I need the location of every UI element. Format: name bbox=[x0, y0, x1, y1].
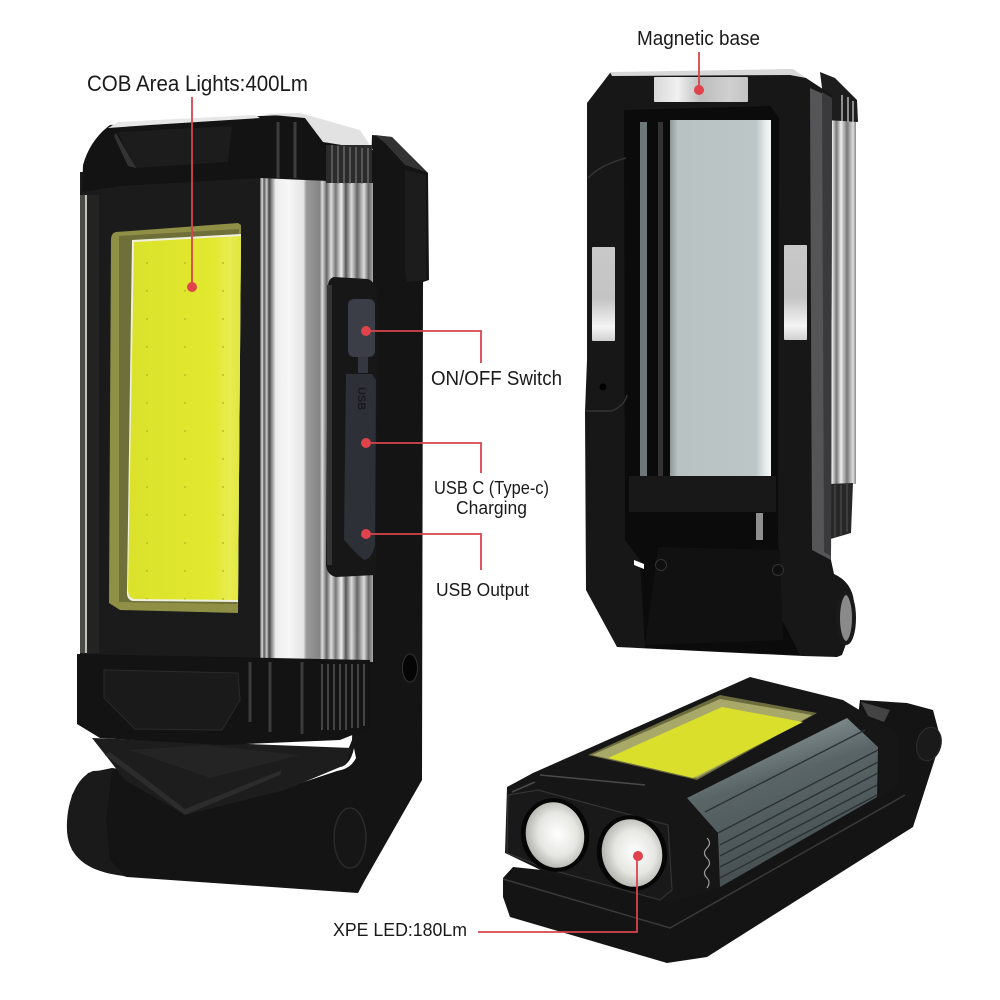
top magnet plate bbox=[654, 77, 748, 102]
COB yellow panel bbox=[128, 236, 241, 600]
back frame bbox=[585, 70, 854, 657]
arm top highlight bbox=[375, 135, 426, 172]
callout: USB C charging: USB C (Type-c) bbox=[434, 478, 549, 498]
body top bbox=[505, 677, 897, 902]
base edge highlight bbox=[503, 795, 905, 928]
aluminium grooves bbox=[705, 730, 878, 878]
top cap highlight left bbox=[108, 115, 260, 128]
lower shelf bbox=[645, 547, 783, 645]
right lens bbox=[588, 807, 676, 899]
frame highlight bbox=[610, 69, 806, 78]
aluminium body bbox=[687, 718, 878, 887]
hinge highlight bbox=[861, 702, 890, 722]
arm pivot hole bbox=[402, 654, 418, 682]
hinge cap bbox=[913, 724, 945, 764]
USB label: USB bbox=[355, 387, 367, 410]
left lens bbox=[513, 790, 597, 880]
chevron bracket bbox=[92, 738, 352, 815]
COB yellow panel bbox=[608, 707, 803, 778]
callout: COB area lights bbox=[87, 71, 308, 292]
COB LED dots bbox=[128, 236, 241, 600]
crossbar bbox=[629, 476, 776, 512]
face plate bbox=[507, 790, 672, 900]
back hinge cap bbox=[838, 593, 854, 643]
bottom cap panel bbox=[104, 670, 240, 730]
rear aluminium bbox=[826, 93, 856, 484]
hinge pivot cap bbox=[334, 808, 366, 868]
panel: front view work light bbox=[67, 113, 429, 893]
inner recess bbox=[624, 106, 800, 655]
body black housing bbox=[80, 172, 262, 660]
panel: front lens view bbox=[503, 677, 945, 963]
right magnet plate bbox=[784, 245, 807, 340]
hinge gap bbox=[335, 748, 356, 771]
top cap bbox=[82, 114, 373, 192]
base plate and arm bbox=[503, 700, 941, 963]
wavy end edge bbox=[704, 838, 710, 888]
callout: USB output: USB Output bbox=[436, 580, 529, 600]
callout: USB C charging bbox=[361, 438, 549, 518]
rear top ribs bbox=[820, 72, 858, 122]
COB window bbox=[588, 695, 817, 780]
rear lower ribs bbox=[827, 483, 853, 540]
callout: USB C charging: Charging bbox=[456, 498, 527, 518]
top cap highlight right bbox=[262, 113, 373, 150]
left magnet plate bbox=[592, 247, 615, 341]
arm notch bbox=[405, 170, 426, 282]
top edge highlights bbox=[512, 775, 645, 792]
power button bbox=[348, 299, 375, 357]
callout: on/off switch: ON/OFF Switch bbox=[431, 368, 562, 390]
top cap ribs bbox=[326, 145, 372, 183]
bottom cap bbox=[77, 654, 370, 745]
callout: on/off switch bbox=[361, 326, 562, 390]
bottom cap ribs bbox=[322, 664, 364, 730]
magnet plate bbox=[670, 120, 771, 476]
hinge cylinder end bbox=[67, 770, 125, 876]
callout: magnetic base: Magnetic base bbox=[637, 28, 760, 50]
rivet right bbox=[772, 564, 784, 576]
side bevel bbox=[810, 88, 832, 560]
magnet left strip bbox=[640, 122, 647, 476]
rubber port cover bbox=[326, 277, 377, 577]
seam bbox=[586, 158, 627, 411]
aluminium side bbox=[260, 176, 373, 662]
callout: USB output bbox=[361, 529, 529, 600]
callout: XPE LED bbox=[333, 851, 643, 940]
panel: back view magnetic base bbox=[585, 69, 858, 657]
COB window frame bbox=[109, 223, 241, 613]
microphone hole bbox=[600, 384, 606, 390]
folding arm bbox=[67, 135, 429, 893]
rivet left bbox=[656, 560, 666, 570]
callout: COB area lights: COB Area Lights:400Lm bbox=[87, 71, 308, 96]
USB plug bbox=[344, 374, 376, 560]
callout: XPE LED: XPE LED:180Lm bbox=[333, 920, 467, 940]
callout: magnetic base bbox=[637, 28, 760, 95]
